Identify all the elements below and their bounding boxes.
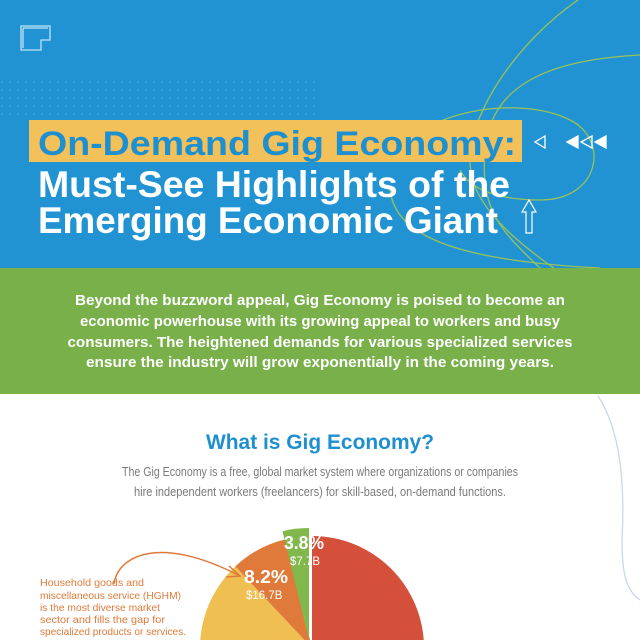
label: 8.2%: 8.2% [244, 567, 288, 587]
intro paragraph: ensure the industry will grow exponentially in the coming years. [86, 355, 554, 371]
description [122, 464, 518, 499]
description: hire independent workers (freelancers) for skill-based, on-demand functions. [134, 484, 506, 499]
pie chart [200, 528, 424, 640]
intro paragraph [68, 293, 572, 371]
description: The Gig Economy is a free, global market system where organizations or companies [122, 464, 518, 479]
header background [0, 0, 640, 268]
label: 8.2% [244, 570, 288, 600]
annotation text [40, 577, 186, 638]
heading: What is Gig Economy: What is Gig Economy? [206, 431, 434, 454]
arrow: annotation [114, 553, 240, 584]
icon: up arrow [522, 200, 536, 233]
title: Emerging Economic Giant [38, 200, 498, 241]
green band [0, 268, 640, 394]
label: 3.8%: $7.7B [290, 556, 320, 568]
annotation text: sector and fills the gap for [40, 614, 166, 626]
decorative light-blue arc [598, 396, 640, 600]
annotation text: Household goods and [40, 577, 144, 589]
title: On-Demand Gig Economy: [38, 125, 516, 163]
annotation text: specialized products or services. [40, 626, 186, 638]
title: Must-See Highlights of the [38, 164, 510, 205]
icon: triangles [535, 136, 606, 148]
title [29, 120, 522, 241]
label: 3.8% [284, 536, 324, 566]
intro paragraph: Beyond the buzzword appeal, Gig Economy is poised to become an [75, 293, 565, 309]
label: 3.8%: 3.8% [284, 533, 324, 553]
annotation text: miscellaneous service (HGHM) [40, 590, 181, 602]
logo icon [21, 26, 50, 50]
intro paragraph: economic powerhouse with its growing appeal to workers and busy [80, 314, 560, 330]
intro paragraph: consumers. The heightened demands for various specialized services [68, 335, 572, 351]
decorative green curves [389, 0, 640, 268]
label: 8.2%: $16.7B [246, 590, 283, 602]
annotation text: is the most diverse market [40, 602, 160, 614]
